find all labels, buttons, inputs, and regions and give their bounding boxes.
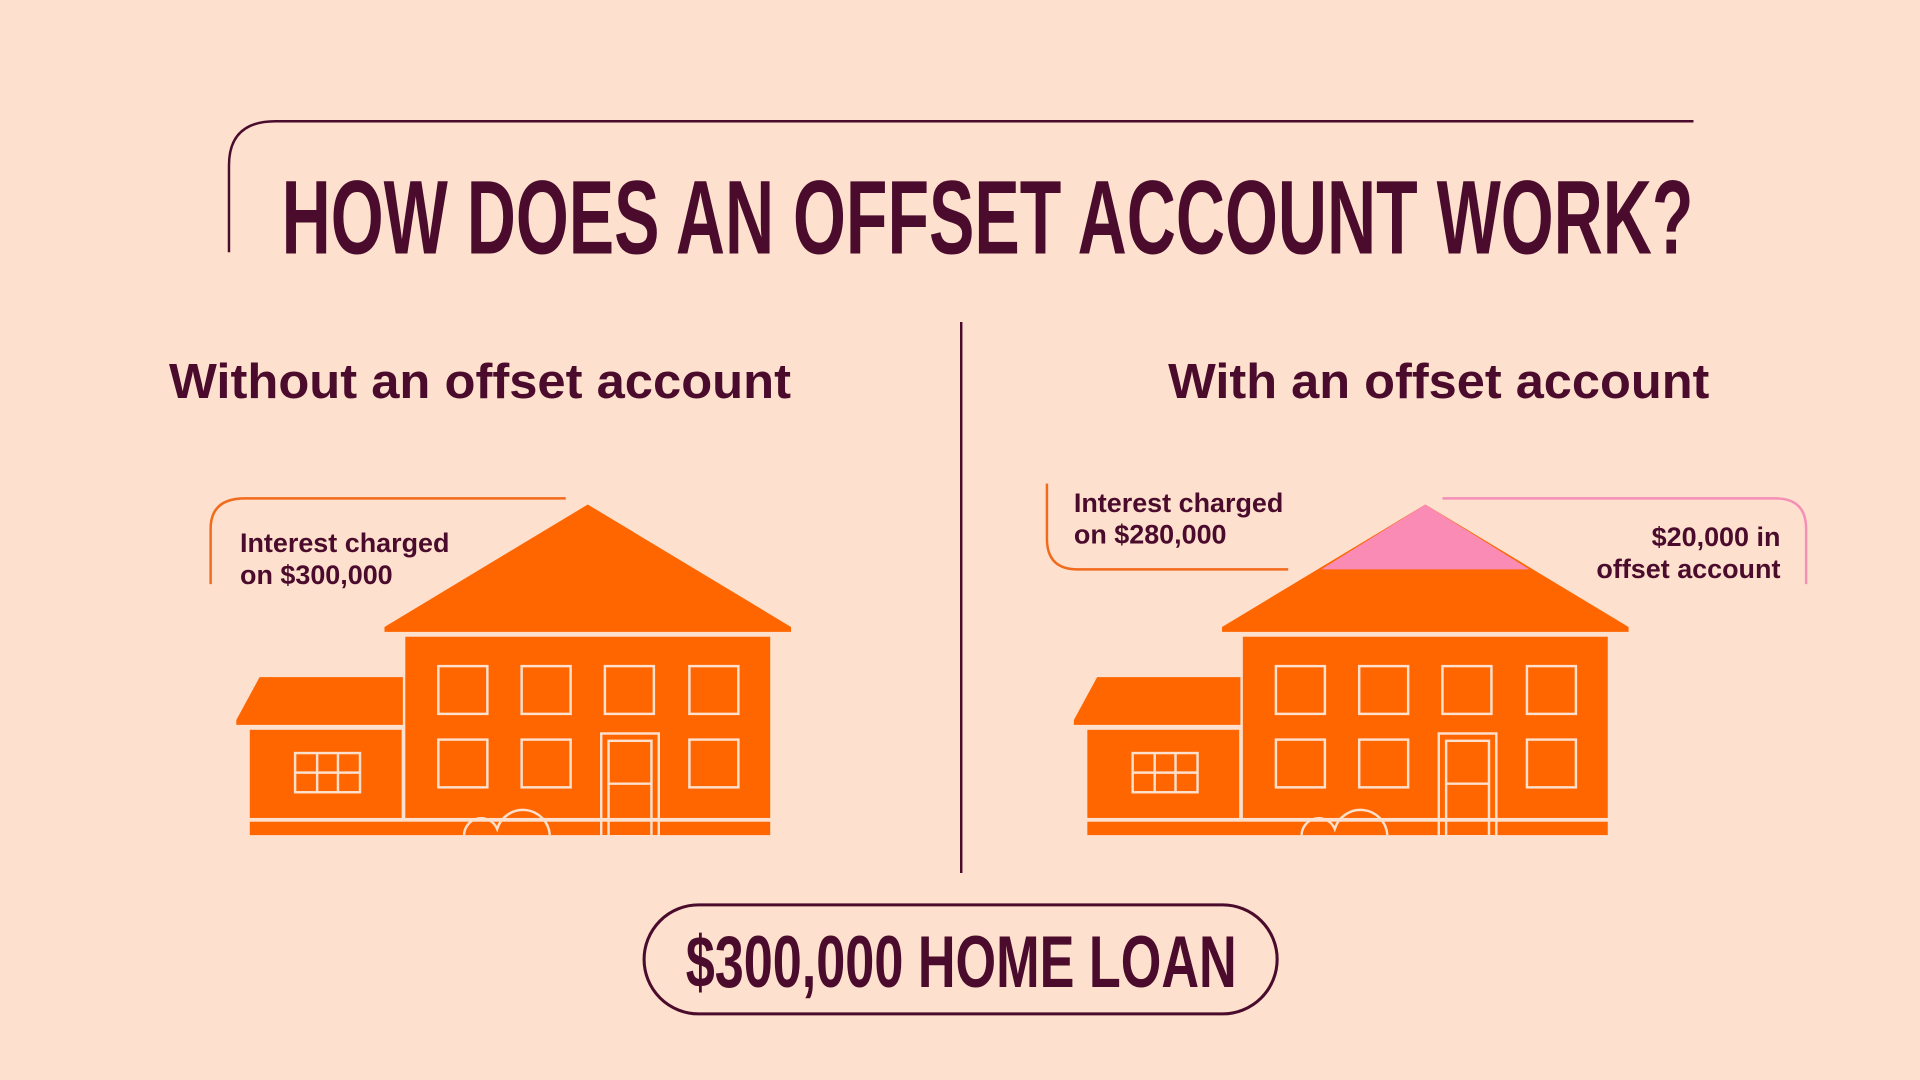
- callout: interest on 300000: [211, 498, 566, 590]
- heading: with: With an offset account: [1168, 355, 1709, 409]
- callout: interest on 280000: on $280,000: [1074, 520, 1227, 550]
- callout: 20000 in offset: offset account: [1596, 554, 1780, 584]
- callout: 20000 in offset: $20,000 in: [1652, 522, 1780, 552]
- callout: interest on 300000: on $300,000: [240, 560, 393, 590]
- callout: interest on 280000: [1047, 484, 1288, 569]
- divider: [960, 322, 962, 873]
- heading: without: Without an offset account: [169, 355, 791, 409]
- house: with offset: [1074, 504, 1629, 836]
- callout: interest on 280000: Interest charged: [1074, 488, 1283, 518]
- title frame: [229, 121, 1693, 252]
- pill: home loan: $300,000 HOME LOAN: [686, 920, 1237, 1003]
- callout: interest on 300000: Interest charged: [240, 528, 449, 558]
- house: without offset: [236, 504, 791, 836]
- pill: home loan: [644, 905, 1277, 1014]
- callout: 20000 in offset: [1442, 498, 1806, 584]
